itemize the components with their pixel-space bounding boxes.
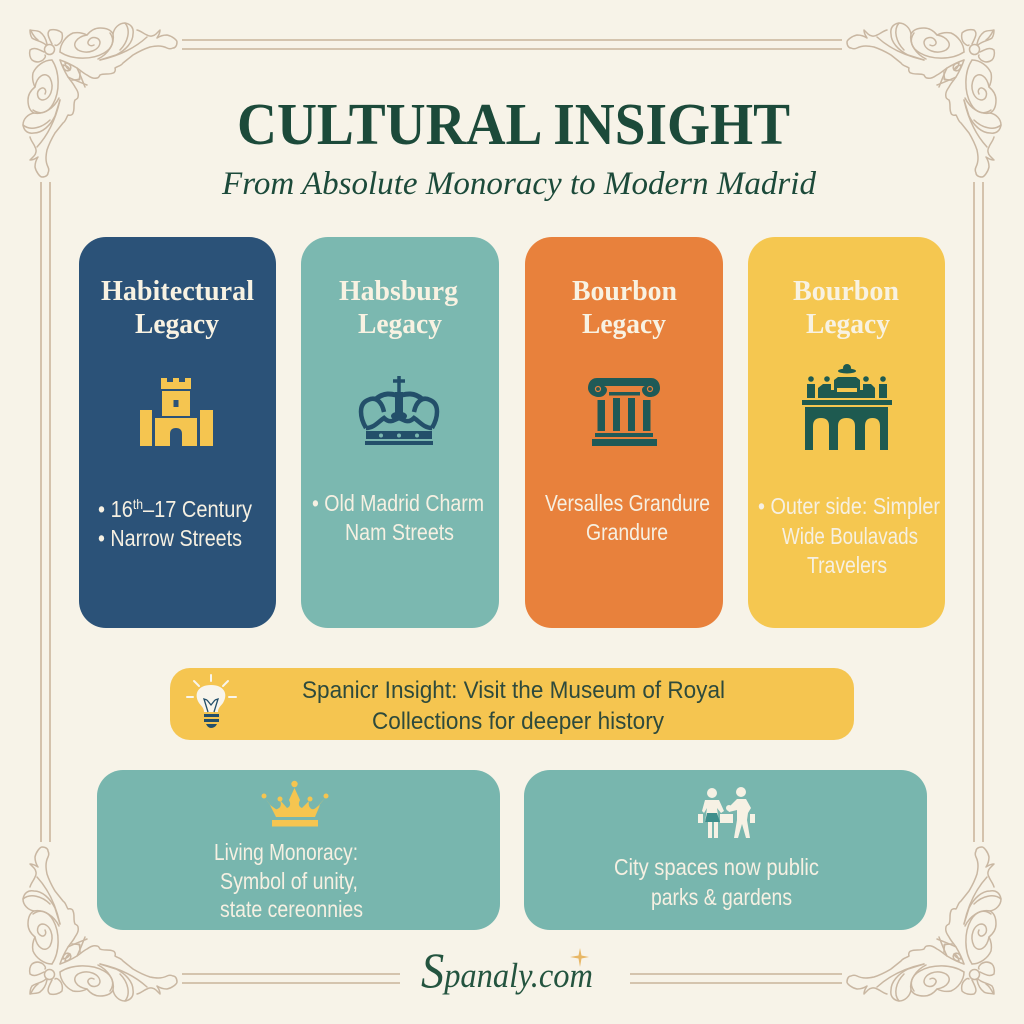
panel: bourbon legacy orange [525,237,723,628]
text block [214,839,363,922]
text block: City spaces now public [614,854,819,880]
callout text: Spanicr Insight: Visit the Museum of Royal [302,677,725,704]
text block: state cereonnies [220,896,363,922]
title: CULTURAL INSIGHT [237,91,790,157]
heading: Legacy [806,308,890,340]
callout text: Collections for deeper history [372,708,664,735]
text block: • Narrow Streets [98,525,242,551]
heading [339,275,458,340]
heading: Habitectural [101,275,254,307]
text block: parks & gardens [651,884,792,910]
icon: sparkle [570,948,589,967]
callout: insight banner [170,668,854,740]
text block [614,854,819,910]
heading: Bourbon [572,275,677,307]
icon: light bulb [187,675,236,728]
panel: habsburg legacy [301,237,499,628]
footer logo: Spanaly.com [421,942,593,998]
heading [572,275,677,340]
panel: city spaces [524,770,927,930]
heading: Legacy [358,308,442,340]
text block: Grandure [586,519,668,545]
text block [758,493,940,578]
callout text [302,677,725,735]
heading: Legacy [135,308,219,340]
text block: Versalles Grandure [545,490,710,516]
panel: habitectural legacy [79,237,276,628]
panel: bourbon legacy yellow [748,237,945,628]
icon: people [698,787,755,838]
panel: living monarchy [97,770,500,930]
text block: Living Monoracy: [214,839,358,865]
icon: crown [361,376,437,445]
heading: Habsburg [339,275,458,307]
text block [545,490,710,545]
icon: column [588,378,660,446]
icon: arched monument [802,364,892,450]
text block: –17 Century [143,496,252,522]
text block: Nam Streets [345,519,454,545]
text block: Travelers [807,552,887,578]
text block: Symbol of unity, [220,868,358,894]
text block [312,490,484,545]
text block: • Outer side: Simpler [758,493,940,519]
subtitle: From Absolute Monoracy to Modern Madrid [221,166,816,202]
heading [793,275,899,340]
icon: gold crown [262,781,328,826]
heading: Legacy [582,308,666,340]
heading: Bourbon [793,275,899,307]
text block: Wide Boulavads [782,523,918,549]
heading [101,275,254,340]
text block: • Old Madrid Charm [312,490,484,516]
text block [98,496,252,551]
text block: • 16 [98,496,138,522]
text block: th [133,496,143,512]
icon: castle [140,378,213,446]
